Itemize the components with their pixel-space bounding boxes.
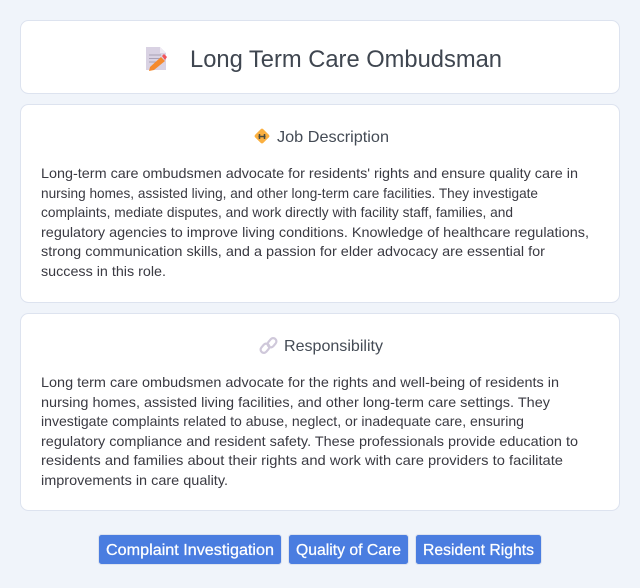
tag: quality of care: Quality of Care bbox=[296, 542, 401, 559]
title text: Long Term Care Ombudsman bbox=[190, 46, 502, 73]
job description text: nursing homes, assisted living, and other long-term care facilities. They investigate bbox=[41, 185, 538, 201]
panel: title bbox=[20, 20, 620, 94]
job description text: strong communication skills, and a passion for elder advocacy are essential for bbox=[41, 243, 545, 259]
job description text: Long-term care ombudsmen advocate for residents' rights and ensure quality care in bbox=[41, 165, 578, 181]
responsibility text: improvements in care quality. bbox=[41, 472, 228, 488]
tag: resident rights bbox=[416, 534, 542, 564]
job description text bbox=[41, 165, 589, 279]
icon: orange diamond bbox=[254, 128, 270, 144]
tag: complaint investigation: Complaint Investigation bbox=[106, 542, 274, 559]
responsibility text: regulatory compliance and resident safety. These professionals provide education to bbox=[41, 433, 578, 449]
job description text: success in this role. bbox=[41, 263, 166, 279]
job description text: complaints, mediate disputes, and work directly with facility staff, families, and bbox=[41, 204, 513, 220]
job description text: regulatory agencies to improve living conditions. Knowledge of healthcare regulations, bbox=[41, 224, 589, 240]
heading: responsibility: Responsibility bbox=[284, 338, 383, 355]
responsibility text: nursing homes, assisted living facilities, and other long-term care settings. They bbox=[41, 394, 550, 410]
panel: job description bbox=[20, 104, 620, 302]
icon: document with pencil bbox=[146, 47, 167, 71]
tag: complaint investigation bbox=[98, 534, 282, 564]
panel: responsibility bbox=[20, 314, 620, 510]
responsibility text bbox=[41, 374, 578, 488]
responsibility text: residents and families about their rights and work with care providers to facilitate bbox=[41, 452, 563, 468]
icon: chain link bbox=[259, 337, 278, 354]
tag: resident rights: Resident Rights bbox=[423, 542, 534, 559]
tag: quality of care bbox=[288, 534, 408, 564]
responsibility text: Long term care ombudsmen advocate for the rights and well-being of residents in bbox=[41, 374, 559, 390]
responsibility text: investigate complaints related to abuse, neglect, or inadequate care, ensuring bbox=[41, 413, 524, 429]
heading: job description: Job Description bbox=[277, 129, 389, 146]
